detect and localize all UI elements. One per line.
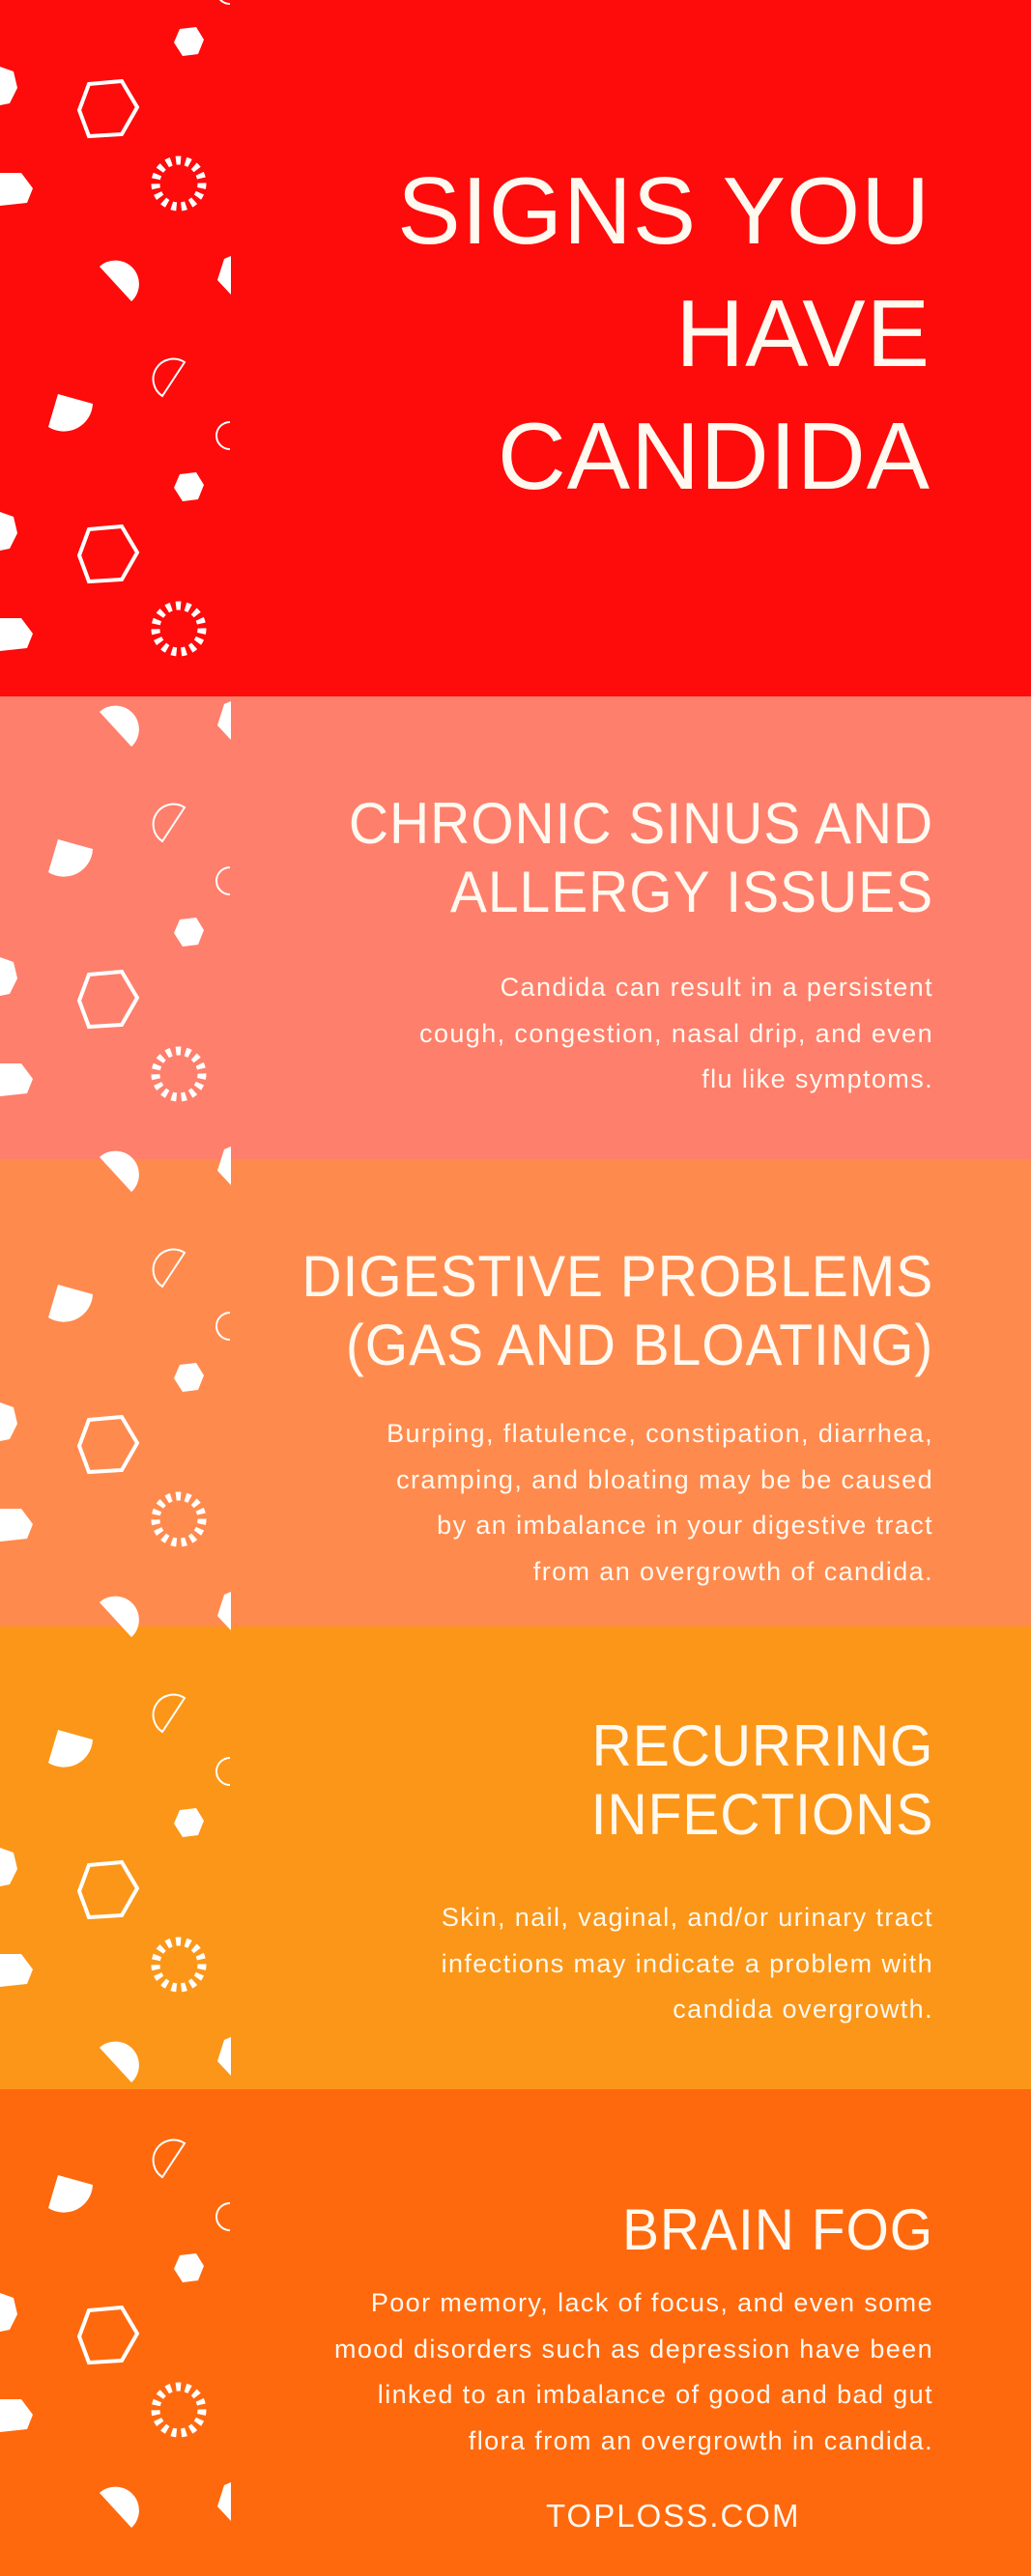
text: digestive: Burping, flatulence, constipation, diarrhea, — [387, 1419, 933, 1448]
text: digestive: from an overgrowth of candida. — [533, 1557, 933, 1586]
text: infections: infections may indicate a problem with — [442, 1949, 933, 1978]
footer: site: TOPLOSS.COM — [546, 2498, 800, 2534]
heading: infections — [590, 1713, 933, 1847]
text: sinus: flu like symptoms. — [702, 1064, 933, 1093]
text: brain fog: linked to an imbalance of good and bad gut — [378, 2380, 933, 2409]
text: sinus — [419, 973, 933, 1093]
text: digestive: cramping, and bloating may be be caused — [396, 1464, 933, 1493]
panel: digestive — [0, 1159, 1031, 1627]
text: brain fog: mood disorders such as depression have been — [334, 2334, 933, 2363]
heading: digestive: DIGESTIVE PROBLEMS — [301, 1244, 933, 1309]
text: sinus: Candida can result in a persistent — [501, 973, 933, 1002]
panel: sinus — [0, 696, 1031, 1159]
heading: infections: RECURRING — [591, 1713, 933, 1778]
heading: sinus: ALLERGY ISSUES — [450, 860, 933, 924]
heading: digestive: (GAS AND BLOATING) — [346, 1313, 933, 1377]
text: infections: Skin, nail, vaginal, and/or urinary tract — [442, 1903, 933, 1932]
heading: infections: INFECTIONS — [590, 1782, 933, 1847]
text: digestive: by an imbalance in your digestive tract — [437, 1511, 933, 1540]
heading: sinus — [349, 791, 933, 924]
heading: sinus: CHRONIC SINUS AND — [349, 791, 933, 856]
title: HAVE — [675, 280, 931, 386]
panel: brain fog — [0, 2089, 1031, 2576]
panel: infections — [0, 1627, 1031, 2089]
decorative shape column — [0, 0, 231, 2528]
text: brain fog: flora from an overgrowth in candida. — [469, 2426, 933, 2455]
text: sinus: cough, congestion, nasal drip, and even — [419, 1018, 933, 1047]
heading: digestive — [301, 1244, 933, 1377]
title: CANDIDA — [498, 403, 931, 509]
text: infections — [442, 1903, 933, 2024]
text: brain fog: Poor memory, lack of focus, and even some — [371, 2288, 933, 2317]
heading: brain fog: BRAIN FOG — [622, 2197, 933, 2262]
text: digestive — [387, 1419, 933, 1586]
text: brain fog — [334, 2288, 933, 2455]
text: infections: candida overgrowth. — [673, 1995, 933, 2024]
title — [397, 157, 931, 509]
panel: header — [0, 0, 1031, 696]
title: SIGNS YOU — [397, 157, 931, 264]
